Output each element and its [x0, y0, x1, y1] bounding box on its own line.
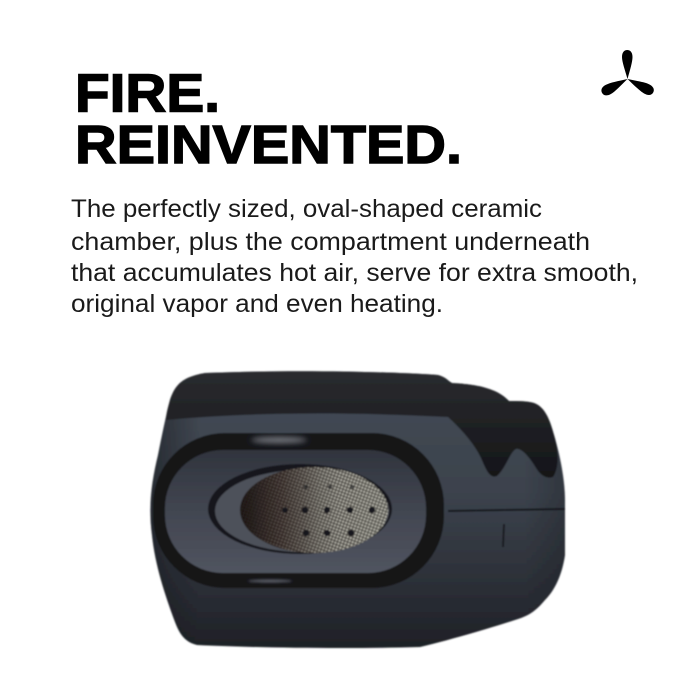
- gasket inner face: [165, 450, 426, 573]
- product photo: device: [150, 371, 565, 648]
- title: REINVENTED.: [75, 115, 462, 175]
- description text: [71, 195, 638, 318]
- gasket top highlight: [251, 437, 307, 443]
- body side shading: [150, 371, 565, 648]
- title: FIRE.: [75, 64, 220, 124]
- small side mark: [503, 524, 504, 547]
- device body: [150, 371, 565, 648]
- infographic canvas: [71, 50, 654, 650]
- icon: three-blade logo: [600, 50, 656, 97]
- seam line: [448, 509, 565, 511]
- title: [75, 64, 462, 175]
- gasket outer ring: [153, 433, 444, 588]
- chamber rim shadow: [208, 464, 392, 554]
- ceramic mesh: [240, 467, 388, 553]
- chamber inner wall: [215, 470, 389, 552]
- mesh holes: [282, 485, 375, 536]
- description text: that accumulates hot air, serve for extra smooth,: [71, 259, 638, 287]
- gasket bottom highlight: [248, 580, 292, 582]
- description text: chamber, plus the compartment underneath: [71, 228, 590, 256]
- description text: The perfectly sized, oval-shaped ceramic: [71, 195, 542, 223]
- description text: original vapor and even heating.: [71, 290, 443, 318]
- black top cap: [166, 371, 558, 478]
